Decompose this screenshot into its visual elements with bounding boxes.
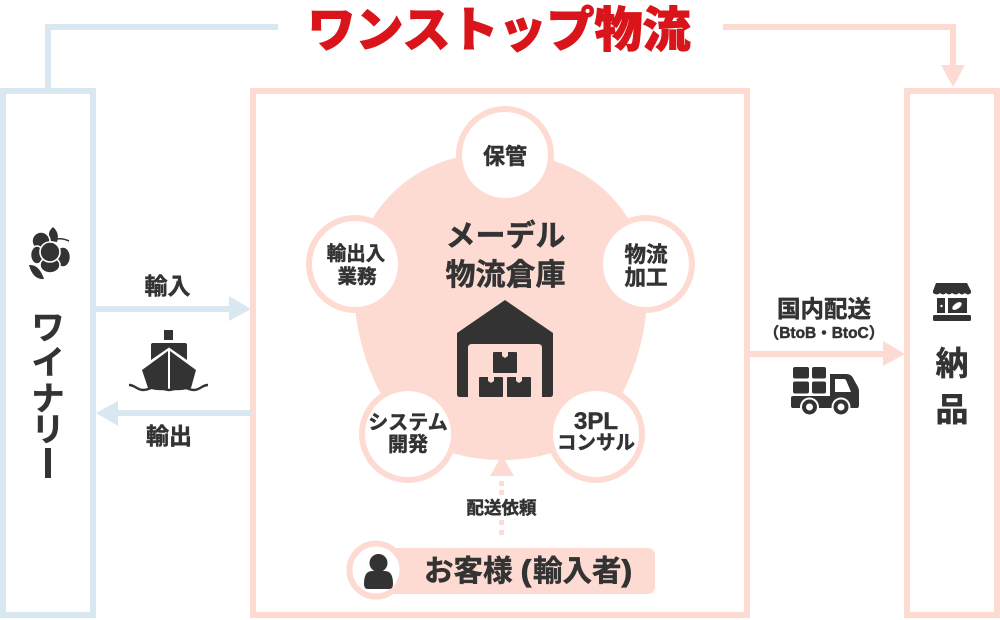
heading: warehouse: 物流倉庫 bbox=[446, 259, 566, 292]
label: import: 輸入 bbox=[144, 273, 190, 299]
panel: logistics warehouse bbox=[253, 91, 747, 615]
label: winery: イ bbox=[32, 344, 64, 381]
heading: warehouse bbox=[446, 219, 566, 292]
node: system development: 開発 bbox=[388, 433, 428, 456]
label: domestic delivery: （BtoB・BtoC） bbox=[764, 325, 884, 342]
panel: delivery bbox=[907, 91, 997, 615]
node: storage bbox=[459, 109, 551, 201]
arrow: delivery request bbox=[490, 455, 514, 535]
central circle bbox=[354, 154, 647, 460]
node: system development: システム bbox=[368, 412, 448, 434]
panel: winery bbox=[3, 91, 93, 615]
node: 3PL consulting: 3PL bbox=[574, 408, 618, 435]
icon: shop bbox=[933, 283, 971, 321]
node: import export work bbox=[309, 218, 401, 310]
node: processing: 物流 bbox=[624, 243, 668, 267]
icon: truck bbox=[791, 367, 859, 416]
customer: お客様 (輸入者) bbox=[424, 555, 632, 588]
label: delivery: 品 bbox=[936, 391, 968, 428]
node: 3PL consulting: コンサル bbox=[557, 432, 635, 454]
label: delivery: 納 bbox=[936, 345, 968, 382]
arrow: delivery bbox=[750, 341, 905, 366]
label: delivery bbox=[936, 345, 968, 428]
label: delivery request: 配送依頼 bbox=[466, 498, 537, 518]
label: winery: ワ bbox=[32, 309, 64, 346]
node: processing: 加工 bbox=[624, 266, 668, 290]
icon: ship bbox=[129, 330, 208, 390]
label: winery: ナ bbox=[32, 380, 64, 417]
heading: warehouse: メーデル bbox=[446, 219, 566, 253]
node: storage: 保管 bbox=[483, 144, 527, 169]
node: import export work: 業務 bbox=[337, 266, 377, 288]
arrow: export bbox=[96, 401, 251, 426]
title: ワンストップ物流 bbox=[307, 4, 691, 58]
label: winery: リ bbox=[32, 411, 64, 448]
label: winery bbox=[32, 309, 64, 478]
arrow: import bbox=[96, 296, 251, 321]
icon: grape flower bbox=[29, 227, 70, 279]
node: 3PL consulting bbox=[550, 388, 642, 480]
node: import export work: 輸出入 bbox=[327, 243, 385, 265]
label: domestic delivery bbox=[764, 296, 884, 342]
node: processing bbox=[600, 218, 692, 310]
node: system development bbox=[362, 388, 454, 480]
label: domestic delivery: 国内配送 bbox=[777, 296, 871, 322]
customer bbox=[350, 544, 655, 596]
label: export: 輸出 bbox=[146, 423, 192, 449]
arrow: winery to delivery overhead right bbox=[723, 27, 965, 87]
arrow: winery to delivery overhead left bbox=[48, 27, 278, 90]
icon: person bbox=[364, 554, 393, 589]
icon: warehouse bbox=[457, 300, 553, 397]
